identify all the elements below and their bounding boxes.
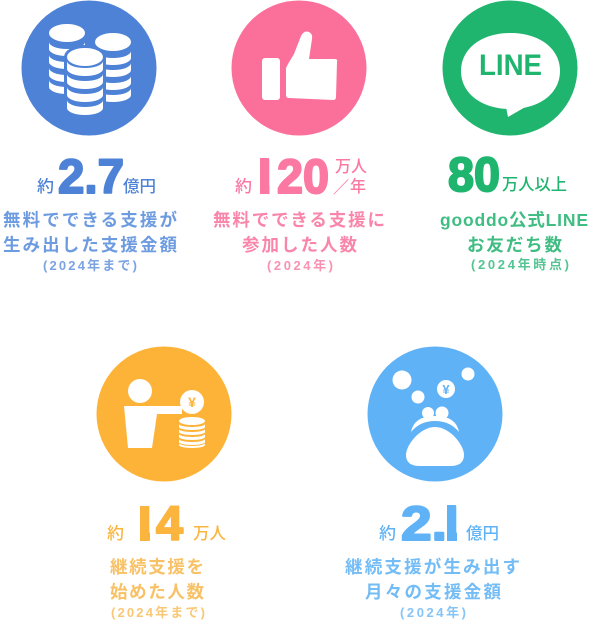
description: (2024年時点) — [471, 257, 569, 272]
figure: 2.1 oku yen: 1 — [436, 498, 463, 551]
panel: LINE friends — [440, 0, 588, 272]
figure: 1.2 million per year: 年 — [350, 177, 366, 196]
description: (2024年まで) — [43, 258, 137, 273]
description: 生み出した支援金額 — [3, 235, 178, 255]
description — [440, 210, 588, 272]
figure: 2.7 oku yen: 2.7 — [58, 151, 124, 204]
description: 無料でできる支援が — [3, 210, 178, 230]
figure: 2.1 oku yen: 約 — [379, 524, 396, 543]
figure: 2.1 oku yen: 2. — [401, 498, 447, 551]
figure: 1.2 million per year: 約 — [235, 177, 252, 196]
figure: 140 thousand people: 4 — [156, 498, 183, 551]
panel: participants — [213, 0, 385, 273]
icon: thumbs up — [232, 0, 366, 136]
icon: LINE speech bubble — [442, 0, 578, 136]
figure: 140 thousand people — [107, 506, 226, 541]
figure: 800 thousand or more — [448, 149, 567, 202]
panel: continuing supporters — [96, 346, 232, 620]
description — [213, 210, 385, 273]
description: (2024年) — [400, 605, 466, 620]
description: 継続支援が生み出す — [345, 557, 520, 577]
description — [3, 210, 178, 273]
description: 継続支援を — [110, 557, 204, 577]
figure: 2.7 oku yen: 億円 — [123, 177, 156, 196]
icon: coin stacks — [22, 0, 156, 136]
icon: LINE speech bubble: LINE — [479, 49, 542, 82]
description: 参加した人数 — [242, 235, 358, 255]
description: (2024年) — [267, 258, 333, 273]
figure: 2.7 oku yen — [37, 151, 156, 204]
figure: 1.2 million per year — [235, 158, 366, 194]
icon: coin purse: ¥ — [442, 382, 450, 397]
figure: 800 thousand or more: 万人以上 — [502, 175, 567, 194]
icon: person giving coin — [96, 346, 232, 482]
figure: 2.1 oku yen: 億円 — [466, 524, 499, 543]
icon: person giving coin: ¥ — [188, 394, 196, 410]
figure: 140 thousand people: 約 — [107, 524, 124, 543]
figure: 1.2 million per year: 20 — [277, 151, 329, 204]
description: 始めた人数 — [110, 582, 204, 602]
figure: 140 thousand people: 1 — [129, 498, 156, 551]
figure: 140 thousand people: 万人 — [193, 525, 226, 543]
figure: 2.1 oku yen — [379, 505, 498, 541]
figure: 1.2 million per year: 1 — [249, 151, 276, 204]
description: お友だち数 — [467, 235, 562, 255]
description: (2024年まで) — [111, 605, 205, 620]
description — [110, 557, 205, 620]
panel: donation total — [3, 0, 178, 273]
icon: coin purse — [368, 346, 502, 482]
panel: monthly amount — [345, 346, 520, 620]
description — [345, 557, 520, 620]
description: 無料でできる支援に — [213, 210, 385, 230]
figure: 1.2 million per year: 万人 — [335, 158, 367, 176]
figure: 800 thousand or more: 80 — [448, 149, 500, 202]
description: gooddo公式LINE — [440, 210, 588, 230]
description: 月々の支援金額 — [365, 582, 502, 602]
figure: 2.7 oku yen: 約 — [37, 177, 54, 196]
figure: 1.2 million per year: ／ — [333, 178, 349, 197]
